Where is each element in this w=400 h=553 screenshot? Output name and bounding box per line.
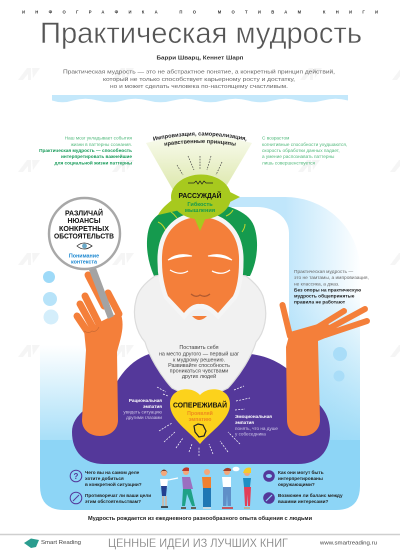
right note: а умение распознавать паттерны bbox=[262, 154, 335, 159]
footer bbox=[0, 534, 400, 550]
side blue dots bbox=[43, 271, 347, 382]
right note bbox=[262, 136, 347, 166]
footer slogan: ЦЕННЫЕ ИДЕИ ИЗ ЛУЧШИХ КНИГ bbox=[108, 536, 288, 550]
beard text: других людей bbox=[182, 373, 216, 380]
left note: Наш мозг укладывает события bbox=[65, 136, 132, 140]
cone label: Импровизация, самореализация, bbox=[153, 132, 246, 142]
question block left bbox=[70, 470, 151, 504]
eyebrows bbox=[168, 255, 232, 260]
headband marks bbox=[158, 210, 245, 232]
question block left: Противоречат ли ваши цели bbox=[85, 493, 151, 498]
rational empathy: увидеть ситуацию bbox=[123, 410, 163, 414]
left note: интерпретировать важнейшие bbox=[61, 153, 132, 159]
think subheading: Гибкость bbox=[187, 201, 213, 208]
eyes bbox=[170, 270, 230, 273]
footer url: www.smartreading.ru bbox=[319, 540, 377, 546]
emotional empathy: эмпатия bbox=[235, 420, 254, 425]
finger lines bbox=[84, 327, 99, 332]
think bubble bbox=[158, 174, 240, 231]
right note on practice: Практическая мудрость — bbox=[294, 269, 353, 275]
handle bbox=[89, 268, 114, 319]
right note on practice bbox=[294, 269, 369, 306]
intro text: который не только способствует карьерному росту и достатку, bbox=[103, 76, 296, 83]
lens heading: НЮАНСЫ bbox=[68, 216, 100, 225]
heart subheading: эмпатию bbox=[189, 417, 212, 423]
think subheading: мышления bbox=[185, 208, 215, 214]
question block right: Как они могут быть bbox=[278, 469, 324, 475]
beard text: Развивайте способность bbox=[168, 362, 230, 369]
mouth bbox=[192, 316, 207, 320]
question block right: окружающими? bbox=[278, 482, 315, 487]
heart bbox=[170, 389, 230, 444]
lens bbox=[49, 198, 120, 269]
question block right bbox=[263, 469, 343, 504]
lens heading: РАЗЛИЧАЙ bbox=[65, 208, 103, 218]
footer logo bbox=[24, 538, 81, 548]
left arm and hand bbox=[77, 275, 123, 436]
lens heading: ОБСТОЯТЕЛЬСТВ bbox=[54, 232, 114, 240]
heart heading: СОПЕРЕЖИВАЙ bbox=[173, 400, 227, 410]
beard text: на место другого — первый шаг bbox=[159, 350, 239, 358]
green headband bbox=[147, 203, 257, 276]
question block right: Возможен ли баланс между bbox=[278, 492, 343, 498]
lens subheading: Понимание bbox=[69, 254, 99, 260]
watermarks bbox=[18, 68, 400, 357]
rational empathy bbox=[123, 398, 163, 420]
question block right: интерпретированы bbox=[278, 476, 323, 481]
intro text: но и может сделать человека по-настоящему счастливым. bbox=[110, 84, 289, 90]
icon: balance bbox=[263, 492, 275, 504]
rational empathy: Рациональная bbox=[129, 398, 162, 403]
icon: percent bbox=[70, 492, 82, 504]
head bbox=[134, 203, 266, 402]
heart subheading: Проявляй bbox=[187, 410, 213, 417]
lens heading: КОНКРЕТНЫХ bbox=[59, 224, 109, 233]
right note on practice: не классика, а джаз. bbox=[294, 282, 339, 288]
purple body bbox=[72, 352, 330, 464]
authors: Барри Шварц, Кеннет Шарп bbox=[156, 56, 244, 62]
beard text: Поставить себя bbox=[179, 345, 219, 351]
icon: speech bbox=[263, 470, 275, 482]
cone label: нравственные принципы bbox=[164, 140, 236, 146]
left note bbox=[39, 136, 132, 166]
speech bubble bbox=[232, 467, 240, 471]
question block right: вашими интересами? bbox=[278, 499, 329, 504]
left note: для социальной жизни паттерны bbox=[55, 160, 132, 166]
emotional empathy: Эмоциональная bbox=[235, 414, 272, 419]
icon: eye bbox=[77, 243, 92, 249]
right note: лишь совершенствуется bbox=[262, 160, 316, 166]
right note on practice: Без опоры на практическую bbox=[294, 288, 361, 294]
person 1 bbox=[160, 470, 178, 507]
beard bbox=[134, 270, 266, 402]
right note: скорость обработки данных падает, bbox=[262, 148, 340, 153]
title: Практическая мудрость bbox=[40, 17, 362, 50]
wave banner bbox=[52, 95, 348, 102]
rational empathy: другими глазами bbox=[126, 415, 162, 420]
person 4 bbox=[222, 467, 240, 508]
wavy brain line bbox=[188, 181, 213, 184]
magnifier bbox=[49, 198, 120, 319]
footer logo: Smart Reading bbox=[41, 540, 81, 546]
think heading: РАССУЖДАЙ bbox=[178, 191, 222, 200]
question block left: хотите добиться bbox=[85, 475, 124, 481]
intro text: Практическая мудрость — это не абстрактное понятие, а конкретный принцип действий, bbox=[63, 68, 336, 76]
heart subheading bbox=[187, 410, 213, 423]
icon: question: ? bbox=[74, 472, 79, 481]
beard text bbox=[159, 345, 239, 380]
conclusion line: Мудрость рождается из ежедневного разнообразного опыта общения с людьми bbox=[88, 515, 312, 522]
person 5 bbox=[243, 468, 251, 508]
right note on practice: это не тамтамы, а импровизация, bbox=[294, 276, 369, 281]
right note: С возрастом bbox=[262, 136, 289, 140]
series label: ИНФОГРАФИКА ПО МОТИВАМ КНИГИ bbox=[22, 10, 378, 14]
question block left: Чего вы на самом деле bbox=[85, 470, 140, 475]
intro text bbox=[63, 68, 336, 90]
nose bbox=[191, 294, 210, 296]
blue background shape bbox=[40, 197, 360, 510]
right note: когнитивные способности ухудшаются, bbox=[262, 142, 347, 147]
right arm and hand bbox=[282, 305, 367, 436]
icon: hands bbox=[194, 424, 206, 437]
think subheading bbox=[185, 201, 215, 214]
emotional empathy: понять, что на душе bbox=[235, 426, 278, 431]
heart rays bbox=[157, 386, 250, 456]
left note: Практическая мудрость — способность bbox=[39, 147, 132, 153]
rays bbox=[177, 156, 222, 175]
question block left: в конкретной ситуации? bbox=[85, 481, 142, 487]
emotional empathy bbox=[235, 414, 278, 436]
light cone bbox=[146, 136, 252, 190]
beard text: проникаться чувствами bbox=[170, 368, 228, 374]
beard text: к мудрому решению. bbox=[173, 358, 225, 364]
lens subheading: контекста bbox=[71, 260, 98, 266]
face bbox=[162, 217, 239, 313]
right note on practice: мудрость общепринятые bbox=[294, 292, 355, 300]
question block left: этим обстоятельствам? bbox=[85, 498, 141, 504]
people group bbox=[160, 467, 251, 508]
lens subheading bbox=[69, 254, 99, 266]
right note on practice: правила не работают bbox=[294, 298, 346, 306]
rational empathy: эмпатия bbox=[143, 404, 162, 409]
left note: жизни в паттерны сознания. bbox=[71, 142, 132, 147]
emotional empathy: у собеседника bbox=[235, 432, 266, 436]
person 3 bbox=[202, 469, 211, 508]
lens heading bbox=[54, 208, 114, 240]
person 2 bbox=[181, 467, 196, 508]
